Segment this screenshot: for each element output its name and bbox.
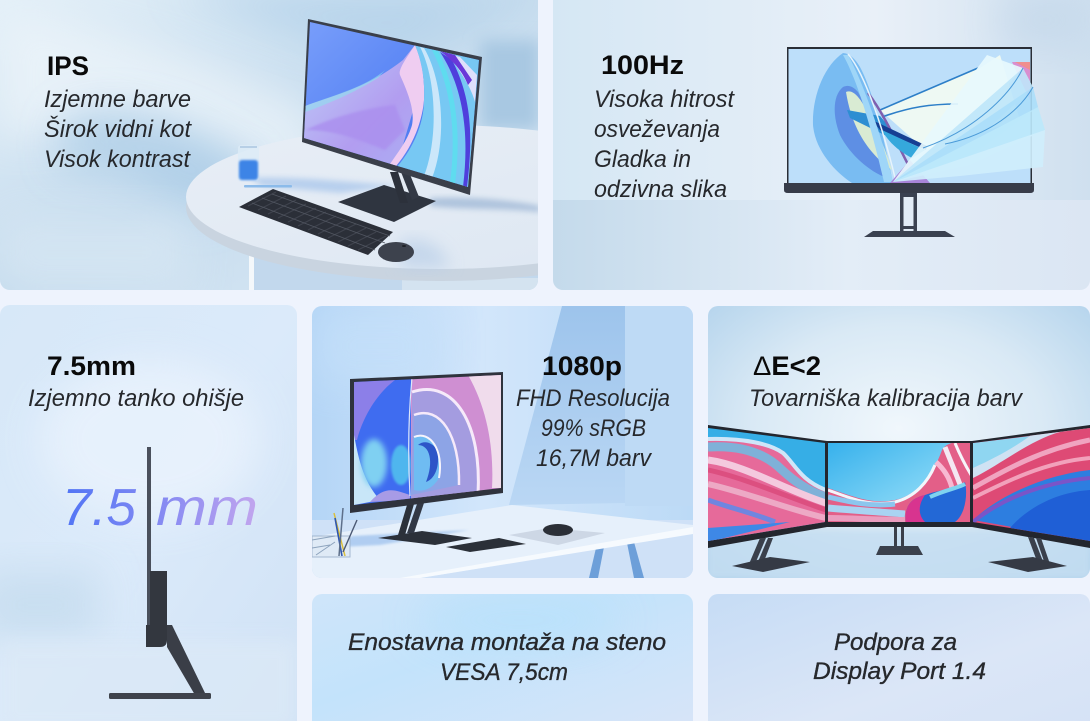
round table <box>186 126 538 281</box>
text: IPS features: Visok kontrast <box>44 146 191 173</box>
panel: color calibration <box>708 306 1090 578</box>
text: VESA mount <box>348 629 666 686</box>
panel: 7.5mm <box>0 305 297 721</box>
monitor stand <box>378 503 472 545</box>
heading: delta E: ΔE<2 <box>753 351 821 381</box>
text: VESA mount: VESA 7,5cm <box>440 659 568 686</box>
heading: 100Hz: 100Hz <box>601 50 684 80</box>
callout: 7.5 mm <box>68 489 256 526</box>
panel: Display Port <box>708 594 1090 721</box>
mouse <box>543 524 573 536</box>
lavender lower left area <box>300 45 425 172</box>
monitor <box>784 47 1045 193</box>
monitor stands <box>732 527 1067 572</box>
pen cup <box>312 508 357 557</box>
pink wedge <box>390 45 424 166</box>
cream ray area <box>881 55 1002 144</box>
text: 100Hz features <box>594 86 735 203</box>
slim monitor side view <box>109 447 211 699</box>
text: 1080p features <box>516 385 670 472</box>
heading: 7.5mm: 7.5mm <box>47 351 136 381</box>
keyboard <box>446 538 526 552</box>
panel: VESA mount <box>312 590 693 721</box>
text: 1080p features: FHD Resolucija <box>516 385 670 412</box>
text: 100Hz features: osveževanja <box>594 116 720 143</box>
left half glow <box>354 380 395 440</box>
text: 100Hz features: Visoka hitrost <box>594 86 735 113</box>
callout: 7.5 mm: mm <box>156 479 258 537</box>
heading: IPS: IPS <box>47 51 89 81</box>
panel: 100Hz <box>553 0 1090 290</box>
monitor <box>300 19 485 195</box>
text: VESA mount: Enostavna montaža na steno <box>348 629 666 656</box>
text: Display Port <box>813 629 986 685</box>
text: IPS features: Izjemne barve <box>44 86 191 113</box>
table leg <box>249 256 538 290</box>
monitor <box>350 372 503 513</box>
panel: IPS <box>0 0 538 290</box>
icon: glass of water <box>238 145 292 188</box>
heading: 1080p: 1080p <box>542 351 622 381</box>
text: ultra slim body: Izjemno tanko ohišje <box>28 385 244 412</box>
desk <box>312 505 693 578</box>
text: 1080p features: 99% sRGB <box>541 415 646 442</box>
text: factory calibration: Tovarniška kalibracija barv <box>749 385 1024 412</box>
keyboard <box>239 189 393 255</box>
panel: 1080p <box>312 306 693 578</box>
monitor stand <box>338 172 436 222</box>
mouse <box>378 242 414 262</box>
left monitor <box>708 425 827 548</box>
text: 100Hz features: odzivna slika <box>594 176 727 203</box>
text: 1080p features: 16,7M barv <box>536 445 653 472</box>
dark blue blob <box>906 482 966 522</box>
callout: 7.5 mm: 7.5 <box>62 479 137 537</box>
text: 100Hz features: Gladka in <box>594 146 691 173</box>
leaf <box>813 53 893 183</box>
text: Display Port: Display Port 1.4 <box>813 658 986 685</box>
text: IPS features <box>44 90 192 167</box>
center monitor <box>827 441 973 527</box>
monitor stand <box>864 193 955 237</box>
right arcs <box>411 390 478 500</box>
chin <box>784 183 1034 193</box>
text: IPS features: Širok vidni kot <box>44 115 192 143</box>
light blue fan <box>396 45 479 190</box>
text: Display Port: Podpora za <box>834 629 957 656</box>
wave bottom <box>828 441 973 523</box>
fan blades <box>893 55 1023 182</box>
right monitor <box>972 425 1090 548</box>
mouse pad <box>509 528 605 545</box>
